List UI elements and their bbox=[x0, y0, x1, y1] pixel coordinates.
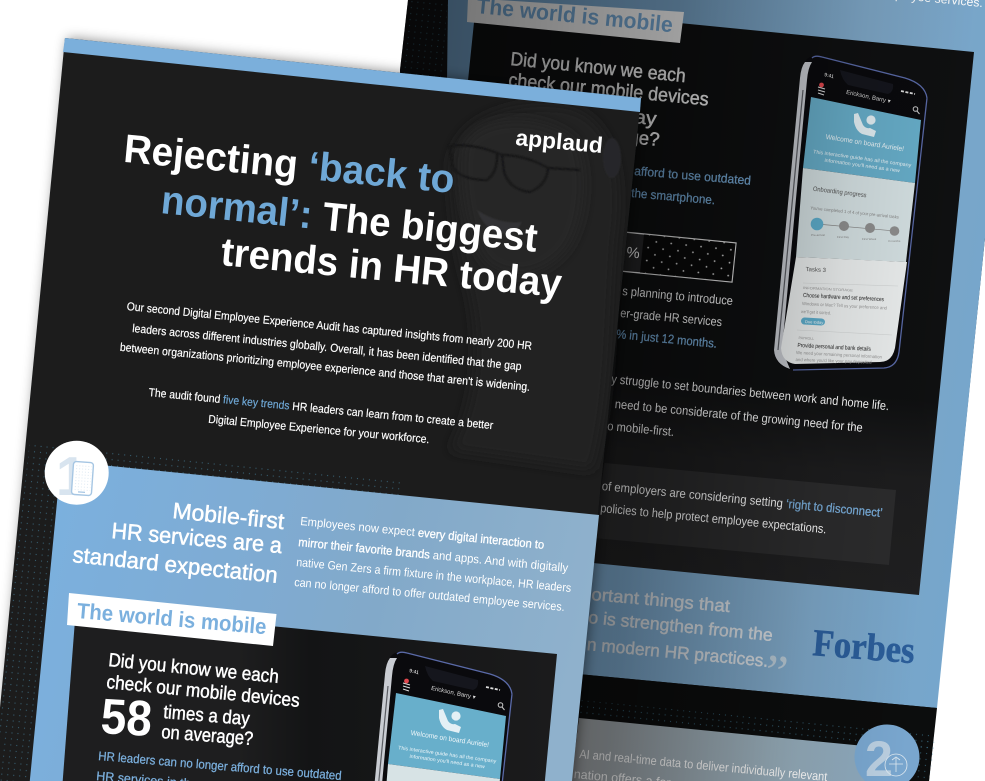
intro paragraph: Our second Digital Employee Experience Audit has captured insights from nearly 200 HR bbox=[126, 301, 532, 353]
back page section 2 dark band bbox=[420, 661, 937, 781]
text: work and home life: need to be considerate of the growing need for the bbox=[614, 397, 863, 435]
phone frame highlights bbox=[793, 56, 927, 370]
app welcome banner: This interactive guide has all the company bbox=[398, 745, 497, 765]
section 1 paragraph: mirror their favorite brands and apps. And with digitally bbox=[298, 535, 569, 575]
key trends paragraph: Digital Employee Experience for your workforce. bbox=[208, 414, 430, 446]
phone notch bbox=[840, 70, 893, 94]
app header: Erickson, Barry ▾ bbox=[430, 686, 476, 701]
front page dark background bbox=[0, 38, 641, 781]
heading text: did you know: Did you know we each bbox=[510, 49, 687, 87]
back page blue section bbox=[440, 0, 985, 708]
app tasks card: Choose hardware and set preferences bbox=[803, 293, 884, 303]
app onboarding progress: You've completed 1 of 4 of your pre-arrival tasks bbox=[810, 205, 900, 220]
app onboarding progress: Pre-arrival bbox=[811, 233, 825, 237]
front dark stats panel bbox=[62, 607, 557, 781]
phone silver side frame bbox=[359, 658, 397, 781]
face bbox=[461, 120, 584, 275]
app tasks card: Windows or Mac? Tell us your preference and bbox=[802, 301, 888, 310]
app onboarding progress: First Week bbox=[862, 237, 877, 241]
section 1 heading bbox=[71, 498, 286, 588]
phone: app mockup back bbox=[774, 56, 927, 370]
text: planning: er-grade HR services bbox=[620, 306, 723, 329]
section 2 gray panel bbox=[570, 718, 905, 781]
app tasks card: we'll get it sorted. bbox=[801, 309, 831, 316]
app welcome banner bbox=[803, 97, 921, 183]
section label: the world is mobile: The world is mobile bbox=[76, 598, 268, 639]
section 1 paragraph: can no longer afford to offer outdated employee services. bbox=[294, 575, 565, 614]
icon: section number 1 with phone: 1 bbox=[56, 445, 87, 507]
app tasks card: and where you'd like your pay deposited bbox=[795, 357, 872, 365]
phone notch bbox=[425, 666, 478, 690]
intro paragraph bbox=[119, 301, 532, 394]
app tasks card: INFORMATION STORAGE bbox=[803, 286, 854, 293]
question text: Did you know we each bbox=[108, 650, 280, 688]
app header: 9:41 bbox=[824, 72, 835, 80]
app tasks card: We need your remaining personal information bbox=[796, 350, 883, 360]
app onboarding progress: 3 months bbox=[888, 239, 901, 243]
heading text: did you know bbox=[508, 49, 710, 151]
callout: right to disconnect: of employers are considering setting ‘right to disconnect’ bbox=[601, 479, 883, 520]
blue text: outdated HR: afford to use outdated bbox=[634, 164, 752, 188]
section 1 blue panel bbox=[25, 461, 599, 781]
heading text: did you know: ay bbox=[634, 107, 658, 130]
back page shadow overlay bbox=[396, 0, 985, 781]
section 1 heading: Mobile-first bbox=[172, 498, 286, 534]
question text bbox=[106, 650, 301, 750]
question text: check our mobile devices bbox=[106, 672, 301, 712]
app welcome banner: information you'll need as a new bbox=[409, 754, 486, 770]
app header: Erickson, Barry ▾ bbox=[845, 90, 891, 105]
question text: on average? bbox=[161, 722, 254, 750]
section 1 heading: HR services are a bbox=[111, 518, 284, 558]
back page dark stats panel bbox=[420, 3, 974, 595]
stat box with pattern bbox=[620, 232, 736, 282]
section 1 heading: standard expectation bbox=[71, 542, 279, 588]
heading text: did you know: check our mobile devices bbox=[508, 70, 710, 111]
glasses bbox=[449, 145, 580, 192]
back page dark background bbox=[396, 0, 985, 781]
blue text: outdated HR: the smartphone. bbox=[631, 186, 716, 207]
icon: section number 1 with phone bbox=[45, 441, 109, 507]
panel: back page bbox=[396, 0, 985, 781]
back page quote: o is strengthen from the bbox=[588, 607, 774, 645]
intro paragraph: leaders across different industries globally. Overall, it has been identified that the gap bbox=[132, 323, 522, 373]
app tasks card: Provide personal and bank details bbox=[797, 343, 871, 353]
dotted decoration bbox=[0, 440, 400, 781]
text: work and home life: y struggle to set boundaries between work and home life. bbox=[611, 372, 890, 413]
text: planning bbox=[616, 284, 734, 351]
app header: 9:41 bbox=[409, 668, 420, 676]
heading text: did you know: ge? bbox=[628, 127, 660, 151]
app welcome banner: This interactive guide has all the company bbox=[813, 149, 912, 169]
phone: app mockup front bbox=[359, 652, 512, 781]
back page quote: ortant things that bbox=[591, 584, 731, 616]
logo: applaud: applaud bbox=[515, 125, 604, 158]
app header bbox=[818, 72, 920, 114]
title: normal’: The biggest bbox=[159, 178, 540, 261]
photo: faint woman with glasses bbox=[449, 105, 621, 470]
stat box with pattern: % bbox=[626, 244, 641, 262]
callout: right to disconnect: policies to help protect employee expectations. bbox=[600, 501, 827, 536]
icon: section number 2 bbox=[854, 724, 920, 781]
app lower screen bbox=[381, 764, 500, 781]
back page dotted margin bbox=[400, 0, 448, 80]
app tasks card: Due today bbox=[805, 319, 823, 325]
app welcome banner bbox=[388, 693, 506, 779]
app header bbox=[403, 668, 504, 710]
app tasks card: Tasks 3 bbox=[805, 267, 827, 274]
panel: front page bbox=[0, 38, 641, 781]
logo: Forbes: Forbes bbox=[811, 622, 916, 672]
app welcome banner: Welcome on board Auriele! bbox=[410, 730, 489, 749]
question text: times a day bbox=[163, 702, 251, 730]
app onboarding progress: First Day bbox=[837, 235, 850, 239]
blue text: outdated HR bbox=[631, 164, 752, 207]
text: planning: % in just 12 months. bbox=[616, 327, 718, 351]
text: planning: s planning to introduce bbox=[622, 284, 734, 308]
phone silver side frame bbox=[774, 62, 812, 369]
text: work and home life: o mobile-first. bbox=[607, 419, 675, 439]
big number 58: 58 bbox=[99, 688, 154, 747]
text: work and home life bbox=[607, 372, 890, 439]
section 1 paragraph: native Gen Zers a firm fixture in the workplace, HR leaders bbox=[296, 555, 572, 595]
intro paragraph: between organizations prioritizing employee experience and those that aren't is widening. bbox=[119, 342, 531, 394]
key trends paragraph: The audit found five key trends HR leaders can learn from to create a better bbox=[148, 387, 494, 432]
section 1 paragraph bbox=[294, 514, 572, 614]
app onboarding progress bbox=[796, 168, 915, 262]
app tasks card: PAYROLL bbox=[798, 336, 814, 341]
section 1 paragraph: Employees now expect every digital interaction to bbox=[300, 514, 545, 552]
title bbox=[122, 127, 564, 306]
app onboarding progress: Onboarding progress bbox=[812, 186, 868, 199]
hair bbox=[450, 105, 619, 470]
top blue band bbox=[63, 38, 641, 112]
title: Rejecting ‘back to bbox=[122, 127, 457, 202]
smile bbox=[477, 210, 522, 234]
app tasks card bbox=[781, 257, 907, 365]
app welcome banner: Welcome on board Auriele! bbox=[825, 134, 904, 153]
headphone bbox=[603, 138, 621, 178]
back page quote: n modern HR practices. bbox=[586, 634, 769, 671]
back page quote bbox=[586, 584, 790, 701]
back page quote: ” bbox=[763, 643, 790, 701]
callout: right to disconnect bbox=[594, 463, 896, 565]
phone frame highlights bbox=[397, 652, 512, 781]
title: trends in HR today bbox=[219, 230, 564, 306]
app welcome banner: information you'll need as a new bbox=[824, 158, 901, 174]
